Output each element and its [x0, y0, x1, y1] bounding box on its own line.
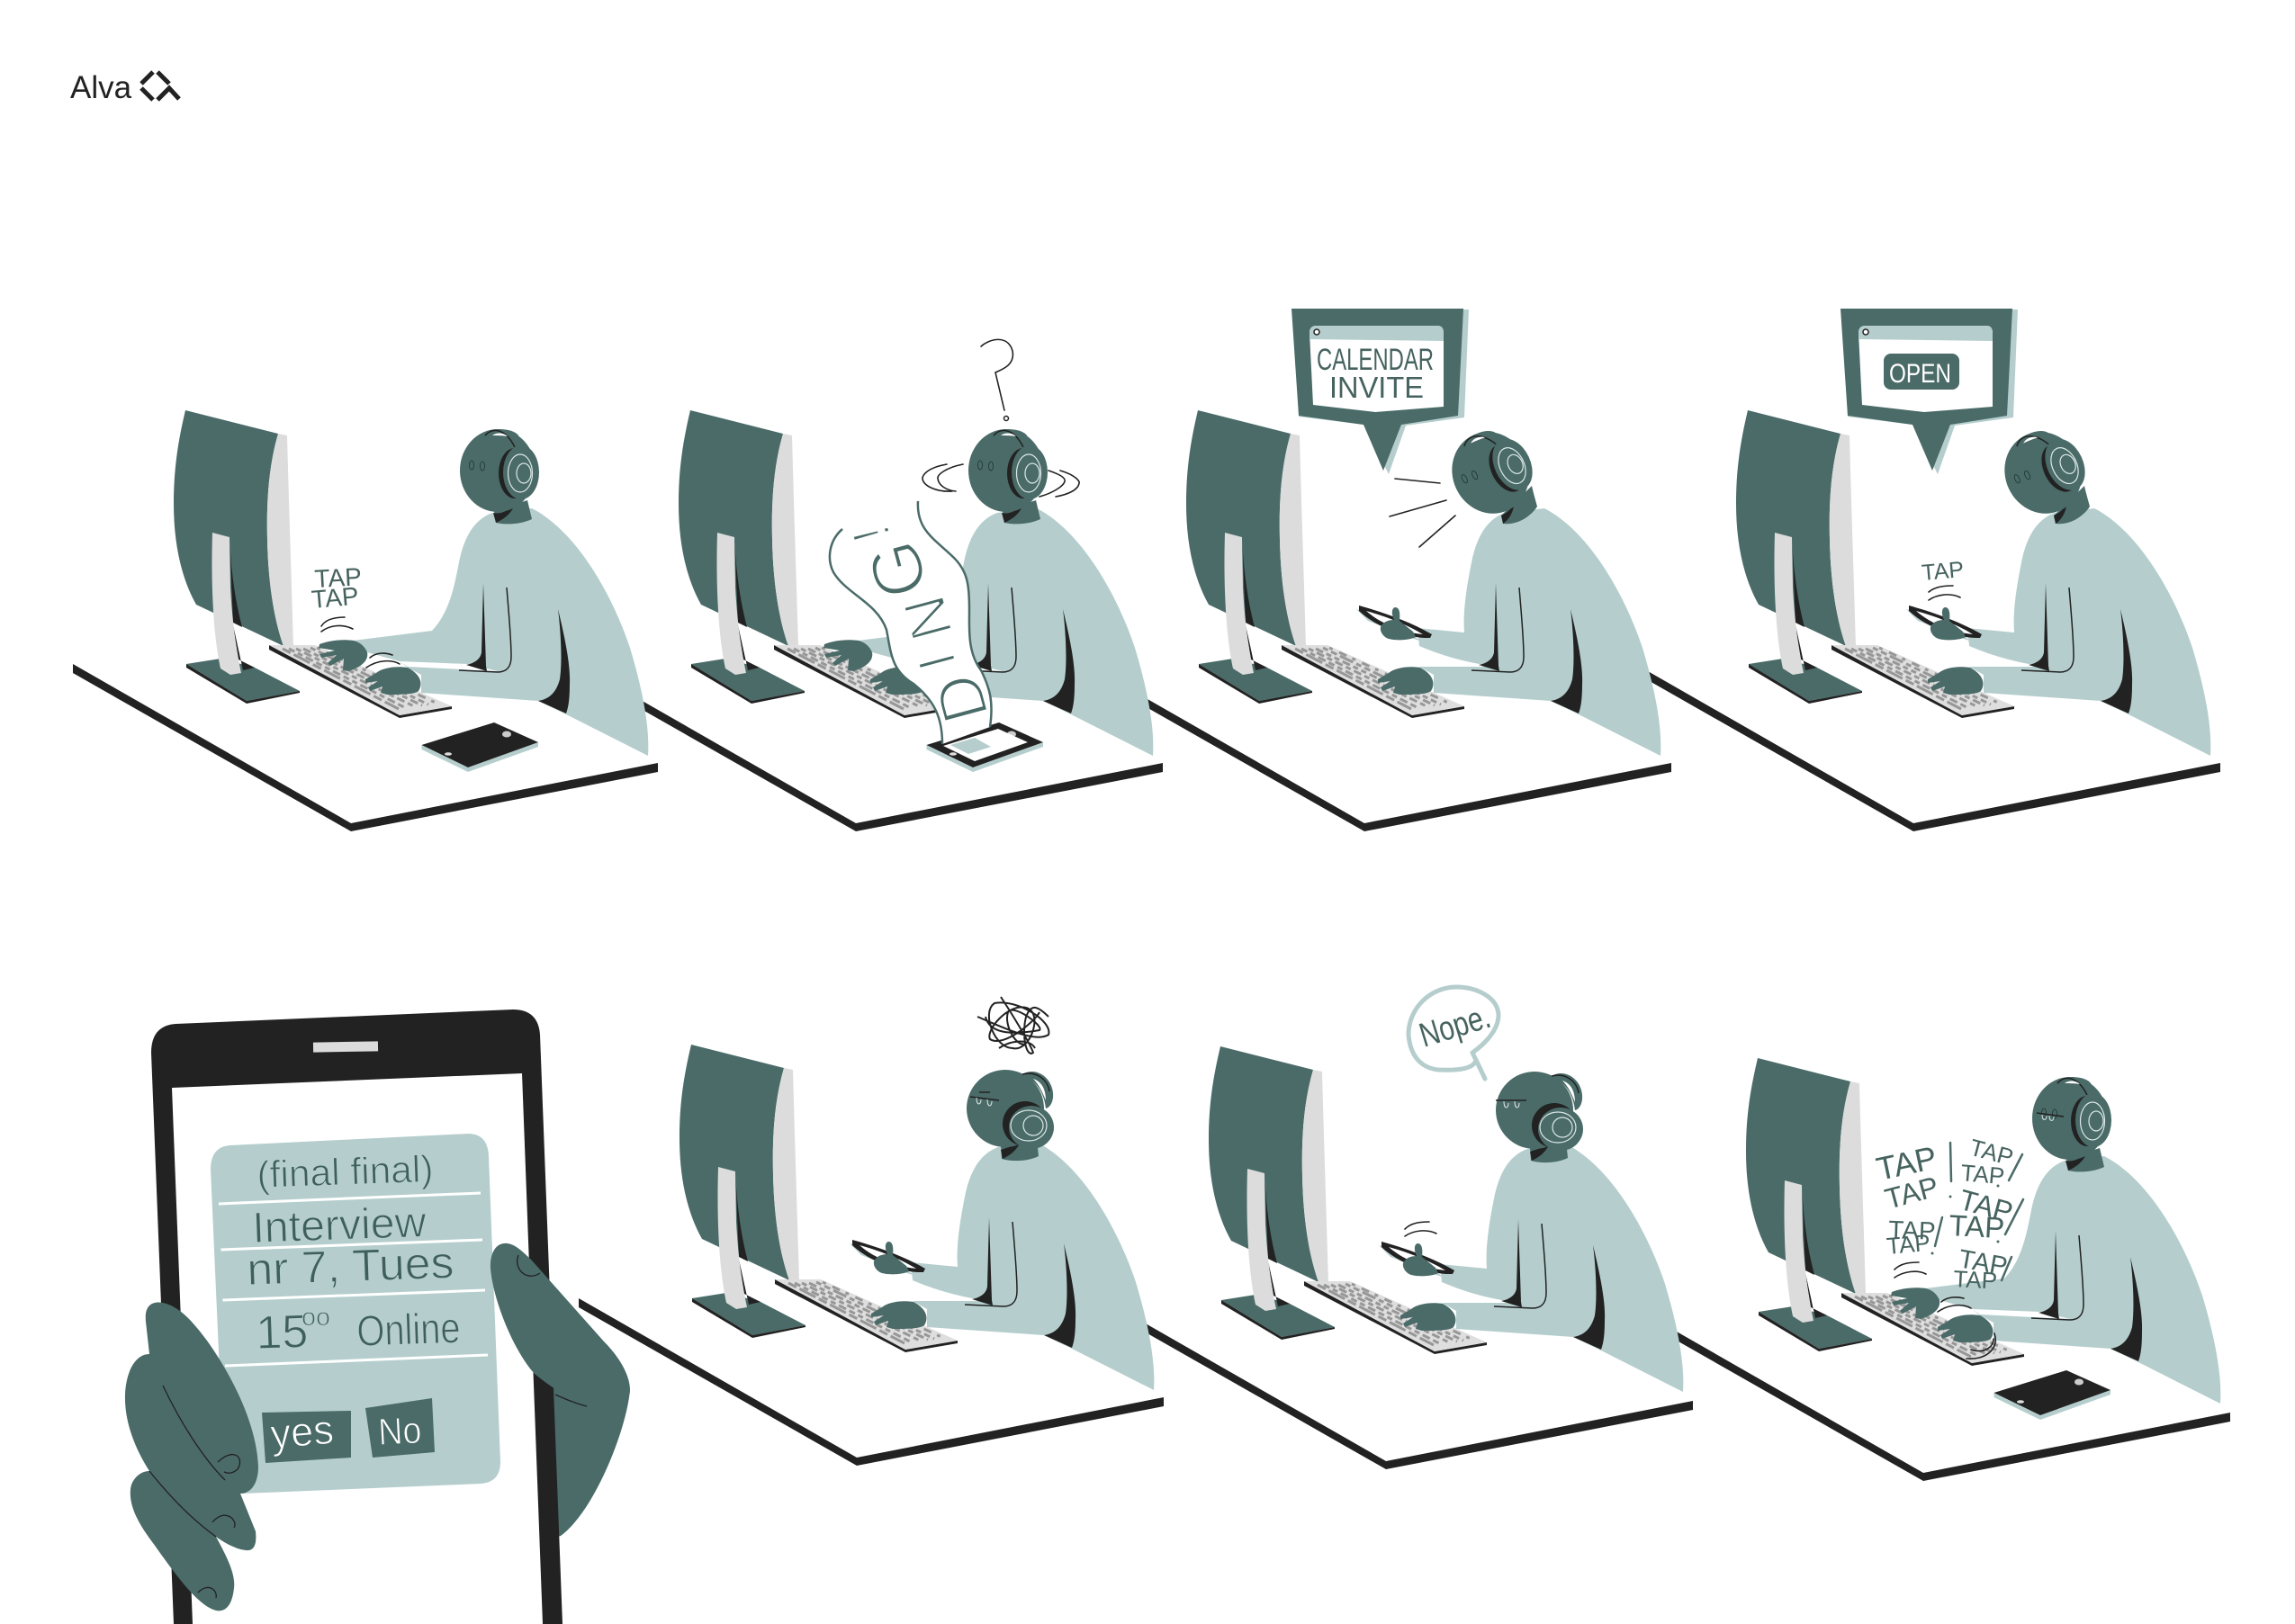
tap tap cluster: TAP: [1953, 1265, 1998, 1295]
DING text: I: [906, 647, 968, 677]
message text: nr 7, Tues: [246, 1237, 454, 1295]
question mark: [981, 339, 1012, 421]
keyboard: [775, 1279, 958, 1352]
phone in hand: [1906, 606, 1982, 642]
desks row 1 and row 2: [73, 664, 2230, 1481]
yes button: yes: [268, 1405, 336, 1458]
tap tap cluster: TAP: [1956, 1183, 2016, 1228]
tap label: TAP: [310, 582, 360, 614]
keyboard: [1304, 1281, 1487, 1354]
keyboard: [774, 645, 957, 718]
logo: Alva wordmark and mark: Alva: [70, 70, 132, 105]
notification lines: [1390, 479, 1455, 547]
head with flat eyes: [1496, 1072, 1583, 1162]
DING text: D: [922, 667, 1003, 731]
tap tap cluster: TAP: [1966, 1134, 2016, 1171]
message text: Online: [356, 1305, 461, 1356]
motion rings around head: [922, 464, 1079, 497]
phone body: [151, 1009, 562, 1624]
monitor: [1209, 1046, 1335, 1340]
panel 1: typing at desk, phone face down: [174, 410, 648, 772]
keyboard: [269, 645, 452, 718]
message text: [246, 1147, 461, 1359]
keyboard: [1832, 645, 2014, 718]
body: [911, 1143, 1154, 1390]
motion arcs: [321, 617, 400, 668]
tap tap cluster: TAP: [1873, 1139, 1940, 1188]
panel 2: phone dings: [679, 339, 1153, 772]
speaker: [313, 1041, 378, 1053]
neck and head: [968, 429, 1048, 524]
body: [1418, 508, 1660, 756]
phone in hand: [1356, 606, 1432, 642]
monitor: [1186, 410, 1312, 704]
message text: (final final): [256, 1147, 434, 1196]
logo: Alva wordmark and mark: [70, 70, 179, 105]
head tilted up: [1992, 417, 2098, 526]
phone in hand: [850, 1240, 925, 1276]
keyboard: [1282, 645, 1464, 718]
keyboard: [1841, 1293, 2024, 1366]
tap tap cluster: TAP: [1948, 1208, 2005, 1244]
speech bubble: calendar invite: [1292, 309, 1469, 474]
hands: [319, 640, 420, 695]
hand on keyboard: [1928, 667, 1983, 695]
hands: [824, 640, 925, 695]
panel 4: opening the invite: [1736, 309, 2210, 756]
panel 7: nope: [1209, 987, 1683, 1392]
hand on keyboard: [1400, 1303, 1455, 1331]
speech bubble: open: [1840, 309, 2018, 474]
hand on keyboard: [1378, 667, 1433, 695]
DING text: N: [890, 588, 966, 648]
speech bubble: nope: [1408, 987, 1498, 1079]
tap tap cluster: TAP: [1881, 1170, 1942, 1216]
ding paper ribbon: [830, 501, 1003, 744]
panel 8: angry typing: [1746, 1058, 2220, 1420]
yes button: [262, 1405, 351, 1463]
phone in hand: [1379, 1242, 1454, 1278]
hands: [1891, 1288, 1993, 1342]
message text: Interview: [252, 1198, 428, 1252]
tap tap cluster: [1873, 1134, 2023, 1295]
monitor: [1736, 410, 1862, 704]
panel 6: irritated, phone in hand: [680, 997, 1154, 1390]
palm behind phone: [551, 1386, 630, 1539]
neck and head with headphones: [460, 429, 539, 524]
body: [1440, 1144, 1683, 1392]
tap label: TAP: [1921, 557, 1965, 586]
monitor: [1746, 1058, 1872, 1351]
body: [858, 508, 1153, 756]
hand on keyboard: [871, 1301, 926, 1329]
tablet/phone on desk: [421, 722, 538, 772]
head with glasses line: [2032, 1077, 2111, 1171]
monitor: [680, 1045, 806, 1338]
monitor: [174, 410, 300, 704]
speech bubble: calendar invite: INVITE: [1329, 371, 1424, 404]
no button: No: [377, 1409, 422, 1453]
tap tap cluster: TAP: [1886, 1229, 1931, 1260]
phone on desk: [1994, 1370, 2110, 1420]
tap tap cluster: TAP: [1957, 1244, 2010, 1281]
tap label: TAP: [314, 562, 363, 593]
body: [1925, 1156, 2220, 1404]
phone on desk with white screen: [927, 722, 1043, 772]
head with annoyed eyes: [967, 1070, 1054, 1161]
motion arcs: [1929, 586, 1960, 600]
tap tap cluster: TAP: [1959, 1159, 2006, 1189]
left hand: [125, 1303, 258, 1611]
motion arcs: [1405, 1222, 1436, 1236]
scribble: [977, 997, 1048, 1054]
speech bubble: open: OPEN: [1889, 359, 1951, 389]
speech bubble: nope: Nope.: [1415, 998, 1495, 1055]
DING text: !: [841, 519, 903, 549]
no button: [365, 1398, 435, 1458]
tap label: [310, 562, 363, 614]
DING text: G: [851, 532, 943, 607]
message text: 15: [255, 1305, 309, 1359]
speech bubble: calendar invite: CALENDAR: [1317, 343, 1434, 377]
motion arcs: [1894, 1262, 1995, 1359]
panel 5: big hands holding phone: [125, 1009, 630, 1624]
right thumb: [490, 1243, 630, 1409]
panel 3: calendar invite arrives: [1186, 309, 1660, 756]
message card: [211, 1134, 500, 1494]
tap tap cluster: TAP: [1888, 1216, 1936, 1245]
body: [353, 508, 648, 756]
monitor: [679, 410, 805, 704]
head tilted up: [1439, 417, 1545, 526]
phone screen: [172, 1073, 543, 1624]
body: [1967, 508, 2210, 756]
message text: oo: [302, 1303, 330, 1331]
